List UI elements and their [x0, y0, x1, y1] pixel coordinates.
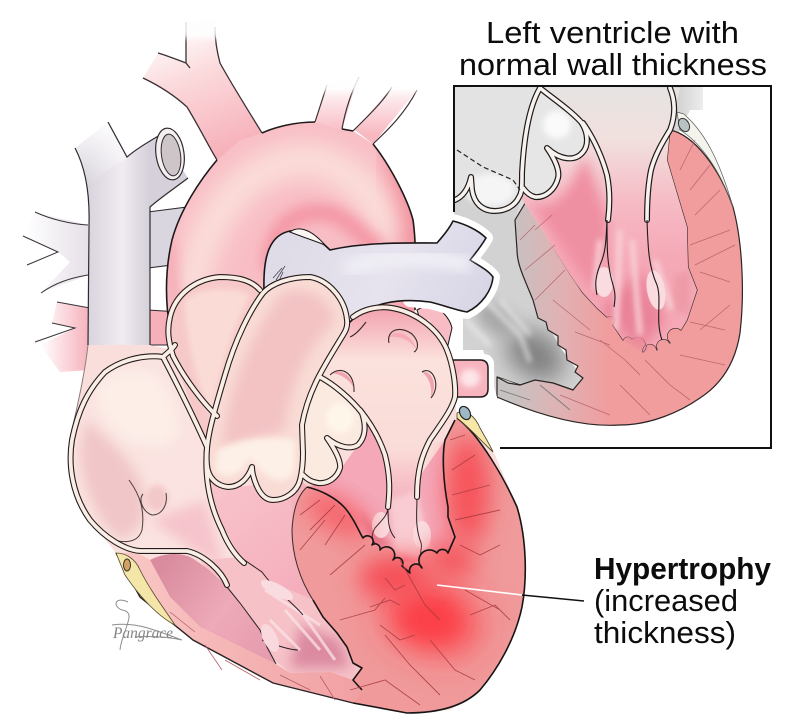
main papillary muscles [372, 512, 390, 538]
aortic arch branches [130, 10, 430, 160]
inset valve walls [455, 88, 674, 220]
heart body base [71, 300, 525, 713]
callout text: hypertrophy (increased thickness) [594, 551, 772, 650]
right ventricle outflow tract [207, 447, 313, 600]
inset chordae [596, 220, 662, 340]
hypertrophied left ventricular wall [170, 418, 525, 713]
aortic cusp marks [330, 322, 436, 398]
red hypertrophy glow [379, 574, 485, 662]
panel: inset left ventricle with normal wall thickness [440, 80, 771, 452]
inset heading: Left ventricle with [486, 15, 739, 50]
left ventricular cavity [307, 410, 455, 563]
coronary fat and vessels [116, 404, 493, 625]
pulmonary leaflet right [207, 277, 347, 500]
pulmonary artery halo [410, 221, 493, 312]
inset frame [454, 86, 771, 448]
lower right pulmonary vein stub [448, 354, 494, 403]
inset background [445, 80, 742, 425]
right ventricular wall [122, 553, 362, 703]
left pulmonary veins and arteries [23, 206, 195, 372]
illustration: main heart cross section [23, 10, 525, 713]
inset white mask [440, 300, 497, 452]
upper right pulmonary vein stub [417, 303, 452, 345]
inset heading: normal wall thickness [459, 47, 767, 82]
callout text: hypertrophy (increased thickness): Hypertrophy [594, 551, 772, 586]
artist signature [112, 600, 182, 650]
fossa ovalis [146, 485, 168, 511]
inset muscle fibres [520, 140, 735, 415]
vena cava opening [153, 126, 187, 182]
right ventricular wall fibres [170, 612, 335, 700]
callout: hypertrophy leader line [437, 585, 584, 601]
inset gray right ventricle [472, 204, 582, 390]
inset outer wall of the left ventricle [497, 130, 742, 425]
aortic leaflet [302, 377, 365, 483]
pulmonary leaflet left [168, 277, 260, 447]
right atrium [71, 356, 250, 590]
inset cavity [520, 88, 697, 352]
artist signature: Pangrace [112, 625, 173, 642]
outer line of the right atrium [70, 345, 88, 440]
wall strokes [71, 277, 455, 585]
inset heading [459, 15, 767, 82]
inset dashed valve line [457, 150, 520, 190]
callout text: hypertrophy (increased thickness): thickness) [594, 615, 736, 650]
valves and wall outlines [71, 277, 455, 585]
inset upper aorta [611, 218, 612, 220]
superior vena cava [70, 112, 188, 400]
aorta [166, 121, 416, 316]
bottom edge of the heart [116, 553, 353, 703]
aortic root [320, 307, 455, 507]
inset papillary muscles [595, 267, 613, 297]
right ventricular interior [150, 554, 362, 680]
left wall muscle fibres [300, 435, 510, 705]
pulmonary artery [264, 221, 493, 322]
callout text: hypertrophy (increased thickness): (increased [594, 583, 738, 618]
inset leaflets [455, 92, 514, 208]
inset coronary vessel [676, 112, 733, 207]
